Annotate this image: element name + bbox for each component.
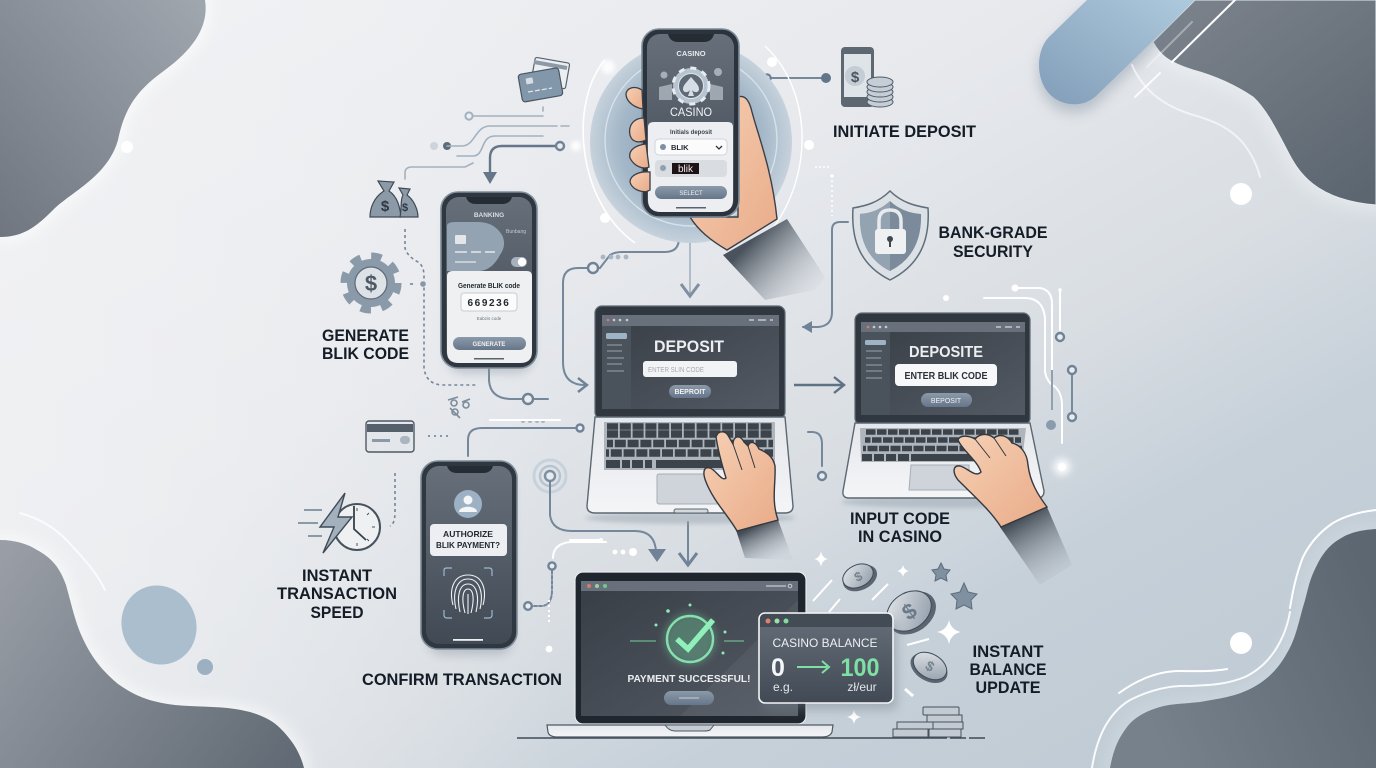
coin small: $ — [852, 568, 865, 585]
heading: confirm transaction: CONFIRM TRANSACTION — [362, 670, 562, 689]
phone screen: CASINO — [676, 49, 706, 58]
laptop base — [587, 417, 793, 513]
laptop screen: ENTER BLIK CODE — [904, 371, 988, 382]
icon: security shield — [853, 191, 928, 280]
trackpad — [657, 474, 719, 504]
sleeve — [736, 520, 793, 560]
phone body — [642, 29, 739, 217]
panel: step 2 banking phone: GENERATE — [473, 342, 505, 348]
panel: step 1 phone with hand — [583, 29, 825, 300]
coin stack — [893, 707, 963, 737]
success check — [630, 604, 744, 665]
hand fingers — [626, 88, 650, 192]
icon: money bags: $ — [402, 202, 408, 214]
panel: step 5 authorize phone: AUTHORIZE — [443, 529, 493, 539]
keyboard — [860, 428, 1026, 462]
icon: money bags: $ — [381, 198, 390, 215]
panel: step 5 authorize phone — [421, 461, 517, 655]
heading: instant transaction speed: SPEED — [310, 603, 364, 622]
panel: casino balance card: zł/eur — [847, 680, 877, 694]
phone screen: BLIK — [671, 143, 689, 152]
icon: coins and stars — [813, 551, 977, 737]
icon: phone with coins — [841, 47, 893, 107]
hand palm — [690, 96, 777, 250]
icon: phone with coins: $ — [851, 69, 860, 86]
heading: bank-grade security: BANK-GRADE — [938, 223, 1048, 242]
coin small — [839, 559, 881, 596]
icon: gear with dollar: $ — [365, 271, 377, 296]
sleeve — [1000, 507, 1072, 585]
phone screen: SELECT — [679, 191, 703, 197]
phone screen — [647, 34, 734, 212]
laptop screen: BEPROIT — [674, 389, 706, 396]
heading: input code in casino: INPUT CODE — [850, 509, 950, 528]
laptop screen — [581, 581, 798, 716]
heading: input code in casino: IN CASINO — [858, 527, 942, 546]
coin lower — [905, 647, 953, 689]
heading: instant balance update: BALANCE — [970, 660, 1046, 679]
panel: step 2 banking phone: Bunbang — [506, 229, 526, 235]
heading: bank-grade security: SECURITY — [953, 242, 1034, 261]
laptop screen — [861, 322, 1025, 415]
laptop lid — [595, 306, 785, 419]
panel: casino balance card — [759, 613, 897, 710]
panel: step 2 banking phone — [441, 192, 537, 373]
panel: step 4 right laptop — [841, 313, 1072, 585]
glowing rings behind phone — [583, 41, 814, 243]
icon: small link glyph — [448, 397, 470, 418]
panel: step 6 success laptop — [517, 572, 985, 738]
coin large — [879, 582, 944, 643]
icon: money bags — [370, 181, 418, 217]
laptop screen: DEPOSIT — [654, 337, 725, 356]
panel: casino balance card: e.g. — [773, 680, 793, 694]
heading: instant balance update: UPDATE — [976, 678, 1040, 697]
sleeve — [723, 219, 825, 300]
panel: step 2 banking phone: BANKING — [474, 212, 504, 219]
panel: step 2 banking phone: Eabzis code — [477, 316, 502, 321]
trackpad — [909, 465, 970, 490]
fingerprint — [444, 568, 492, 618]
keyboard — [604, 422, 775, 470]
panel: casino balance card: 0 — [771, 654, 785, 682]
icon: lightning and clock — [298, 493, 380, 553]
panel: casino balance card: CASINO BALANCE — [772, 636, 878, 650]
stars — [932, 563, 977, 609]
phone screen: blik — [678, 164, 694, 175]
panel: step 3 center laptop — [585, 306, 795, 560]
heading: instant transaction speed: INSTANT — [302, 566, 373, 585]
coin lower: $ — [923, 657, 938, 675]
icon: credit cards — [518, 57, 570, 102]
laptop screen: PAYMENT SUCCESSFUL! — [628, 673, 750, 685]
connectors and arrows — [390, 73, 1076, 652]
hand typing — [704, 432, 778, 531]
heading: generate blik code: GENERATE — [322, 326, 409, 345]
heading: initiate deposit: INITIATE DEPOSIT — [833, 122, 977, 141]
hand typing — [954, 434, 1047, 527]
coin large: $ — [897, 598, 921, 625]
phone screen: CASINO — [670, 105, 712, 119]
panel: step 2 banking phone: 669236 — [468, 298, 510, 309]
panel: casino balance card: 100 — [840, 654, 880, 682]
laptop screen: DEPOSITE — [909, 344, 983, 361]
laptop screen — [602, 315, 779, 409]
phone screen: Initials deposit — [670, 130, 712, 136]
panel: step 5 authorize phone: BLIK PAYMENT? — [436, 540, 500, 550]
avatar — [454, 490, 482, 518]
icon: credit card — [366, 421, 414, 452]
heading: generate blik code: BLIK CODE — [322, 344, 409, 363]
heading: instant transaction speed: TRANSACTION — [277, 584, 397, 603]
laptop screen: ENTER SLIN CODE — [648, 367, 704, 374]
heading: instant balance update: INSTANT — [972, 642, 1044, 661]
laptop screen: BEPOSIT — [931, 398, 962, 405]
bank card — [447, 222, 504, 271]
panel: step 2 banking phone: Generate BLIK code — [458, 283, 520, 290]
icon: casino chip — [659, 68, 723, 104]
icon: gear with dollar — [344, 256, 398, 310]
